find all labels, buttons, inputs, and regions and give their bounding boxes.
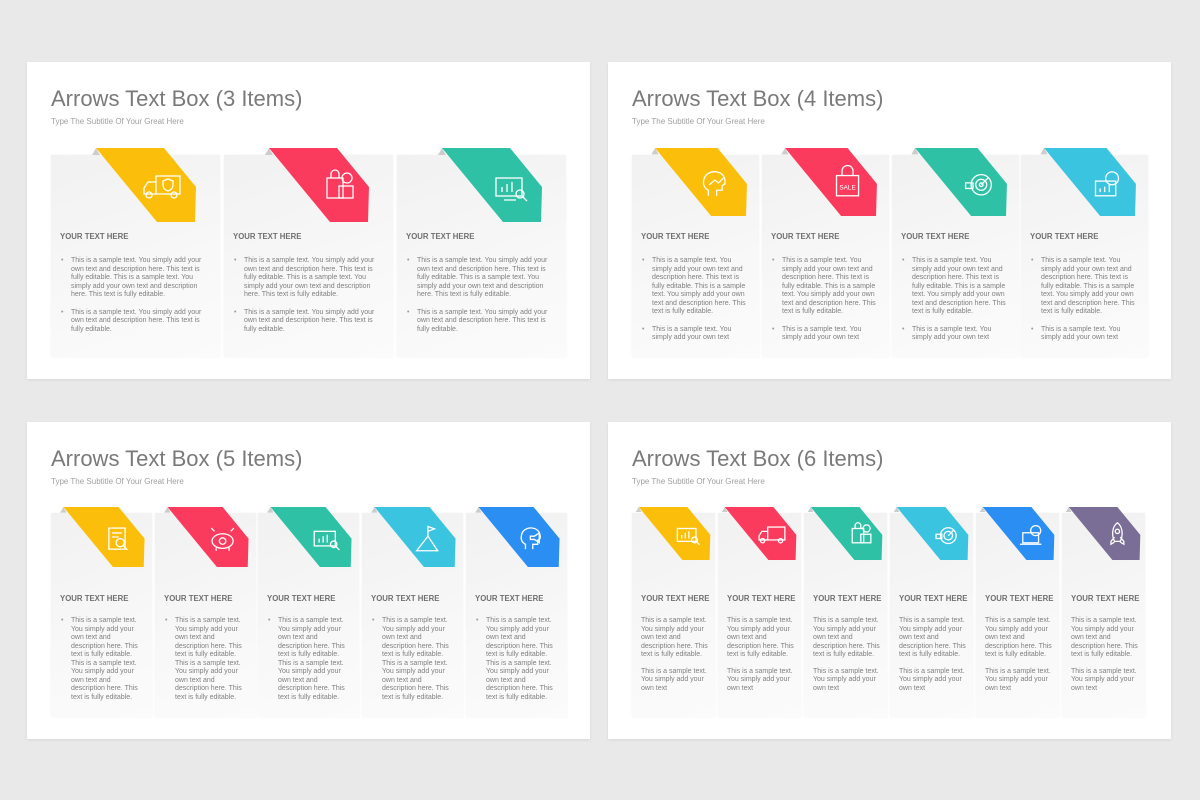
card 2: This is a sample text. You simply add your own text and description here. This text is fully editable. This is a sample text. You simply add your own text and description here. This text is fully editable.: [175, 617, 242, 700]
card 4: This is a sample text. You simply add your own text and description here. This text is fully editable. This is a sample text. You simply add your own text and description here. This text is fully editable.: [1041, 257, 1135, 315]
card 1: [632, 155, 759, 357]
ribbon: cyan gear chart: [1040, 148, 1136, 216]
card 3: [258, 513, 359, 717]
card 1: This is a sample text. You simply add your own text and description here. This text is fully editable. This is a sample text. You simply add your own text and description here. This text is fully editable.: [71, 257, 201, 298]
card 3: [892, 155, 1019, 357]
card 3: This is a sample text. You simply add your own text and description here. This text is fully editable. This is a sample text. You simply add your own text and description here. This text is fully editable.: [278, 617, 345, 700]
card 1: YOUR TEXT HERE: [641, 594, 709, 603]
card 3: YOUR TEXT HERE: [267, 594, 335, 603]
ribbon: teal target: [912, 148, 1007, 216]
card 5: YOUR TEXT HERE: [985, 594, 1053, 603]
card 3: YOUR TEXT HERE: [406, 232, 474, 241]
ribbon: red sale bag: SALE: [839, 184, 856, 191]
card 6: This is a sample text. You simply add your own text: [1071, 668, 1137, 692]
card 1: YOUR TEXT HERE: [60, 594, 128, 603]
card 2: This is a sample text. You simply add your own text and description here. This text is fully editable.: [727, 617, 794, 658]
card 1: YOUR TEXT HERE: [60, 232, 128, 241]
panel: 3 items: [27, 62, 590, 379]
panel: 6 items: [608, 422, 1171, 739]
card 4: [1021, 155, 1148, 357]
card 3: [397, 155, 566, 357]
title: Arrows Text Box (4 Items): [632, 86, 883, 111]
ribbon: purple rocket: [1066, 507, 1140, 560]
card 6: This is a sample text. You simply add your own text and description here. This text is fully editable.: [1071, 617, 1138, 658]
card 2: This is a sample text. You simply add your own text and description here. This text is fully editable. This is a sample text. You simply add your own text and description here. This text is fully editable.: [244, 257, 374, 298]
card 4: YOUR TEXT HERE: [371, 594, 439, 603]
ribbon: red truck: [722, 507, 796, 560]
card 5: This is a sample text. You simply add your own text and description here. This text is fully editable. This is a sample text. You simply add your own text and description here. This text is fully editable.: [486, 617, 553, 700]
card 3: YOUR TEXT HERE: [813, 594, 881, 603]
card 2: This is a sample text. You simply add your own text and description here. This text is fully editable.: [244, 308, 374, 332]
card 1: This is a sample text. You simply add your own text and description here. This text is fully editable. This is a sample text. You simply add your own text and description here. This text is fully editable.: [652, 257, 746, 315]
card 1: This is a sample text. You simply add your own text and description here. This text is fully editable. This is a sample text. You simply add your own text and description here. This text is fully editable.: [71, 617, 138, 700]
card 2: YOUR TEXT HERE: [233, 232, 301, 241]
ribbon: red piggy bank: [164, 507, 249, 567]
ribbon: yellow truck: [92, 148, 196, 222]
subtitle: Type The Subtitle Of Your Great Here: [632, 477, 765, 486]
card 4: YOUR TEXT HERE: [1030, 232, 1098, 241]
card 4: [362, 513, 463, 717]
subtitle: Type The Subtitle Of Your Great Here: [632, 117, 765, 126]
title: Arrows Text Box (3 Items): [51, 86, 302, 111]
panel: 4 items: [608, 62, 1171, 379]
card 3: YOUR TEXT HERE: [901, 232, 969, 241]
ribbon: red sale bag: [782, 148, 877, 216]
card 3: [804, 513, 887, 717]
ribbon: yellow document: [60, 507, 145, 567]
title: Arrows Text Box (5 Items): [51, 446, 302, 471]
card 3: This is a sample text. You simply add your own text and description here. This text is fully editable. This is a sample text. You simply add your own text and description here. This text is fully editable.: [417, 257, 547, 298]
card 1: [51, 155, 220, 357]
card 2: [155, 513, 256, 717]
card 3: This is a sample text. You simply add your own text: [912, 326, 991, 341]
panel: 5 items: [27, 422, 590, 739]
card 6: [1062, 513, 1145, 717]
card 4: This is a sample text. You simply add your own text and description here. This text is fully editable.: [899, 617, 966, 658]
card 1: YOUR TEXT HERE: [641, 232, 709, 241]
card 5: This is a sample text. You simply add your own text and description here. This text is fully editable.: [985, 617, 1052, 658]
card 4: [890, 513, 973, 717]
card 1: This is a sample text. You simply add your own text and description here. This text is fully editable.: [641, 617, 708, 658]
card 2: [718, 513, 801, 717]
ribbon: yellow head: [652, 148, 747, 216]
card 1: This is a sample text. You simply add your own text: [641, 668, 707, 692]
card 5: [976, 513, 1059, 717]
ribbon: cyan target: [894, 507, 968, 560]
card 5: This is a sample text. You simply add your own text: [985, 668, 1051, 692]
subtitle: Type The Subtitle Of Your Great Here: [51, 477, 184, 486]
ribbon: teal chart: [268, 507, 352, 567]
ribbon: yellow chart: [636, 507, 710, 560]
subtitle: Type The Subtitle Of Your Great Here: [51, 117, 184, 126]
card 2: YOUR TEXT HERE: [727, 594, 795, 603]
ribbon: teal chart: [438, 148, 542, 222]
card 1: This is a sample text. You simply add your own text: [652, 326, 731, 341]
card 1: [632, 513, 715, 717]
card 2: YOUR TEXT HERE: [771, 232, 839, 241]
card 2: This is a sample text. You simply add your own text: [782, 326, 861, 341]
card 4: YOUR TEXT HERE: [899, 594, 967, 603]
card 5: [466, 513, 567, 717]
card 3: This is a sample text. You simply add your own text: [813, 668, 879, 692]
card 5: YOUR TEXT HERE: [475, 594, 543, 603]
ribbon: cyan mountain flag: [372, 507, 456, 567]
card 4: This is a sample text. You simply add your own text and description here. This text is fully editable. This is a sample text. You simply add your own text and description here. This text is fully editable.: [382, 617, 449, 700]
card 4: This is a sample text. You simply add your own text: [899, 668, 965, 692]
card 3: This is a sample text. You simply add your own text and description here. This text is fully editable. This is a sample text. You simply add your own text and description here. This text is fully editable.: [912, 257, 1006, 315]
card 2: [224, 155, 393, 357]
card 2: YOUR TEXT HERE: [164, 594, 232, 603]
card 2: This is a sample text. You simply add your own text: [727, 668, 793, 692]
ribbon: blue megaphone head: [476, 507, 560, 567]
ribbon: blue laptop gear: [980, 507, 1054, 560]
card 3: This is a sample text. You simply add your own text and description here. This text is fully editable.: [417, 308, 547, 332]
ribbon: red shopping: [265, 148, 369, 222]
ribbon: teal shopping: [808, 507, 882, 560]
card 3: This is a sample text. You simply add your own text and description here. This text is fully editable.: [813, 617, 880, 658]
title: Arrows Text Box (6 Items): [632, 446, 883, 471]
card 6: YOUR TEXT HERE: [1071, 594, 1139, 603]
card 1: This is a sample text. You simply add your own text and description here. This text is fully editable.: [71, 308, 201, 332]
card 2: [762, 155, 889, 357]
card 1: [51, 513, 152, 717]
card 2: This is a sample text. You simply add your own text and description here. This text is fully editable. This is a sample text. You simply add your own text and description here. This text is fully editable.: [782, 257, 876, 315]
card 4: This is a sample text. You simply add your own text: [1041, 326, 1120, 341]
